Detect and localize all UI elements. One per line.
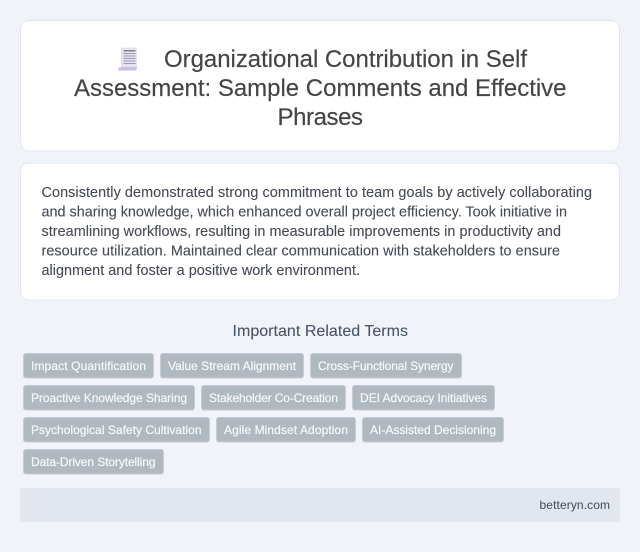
panel: summary text: [20, 163, 620, 300]
tag: Impact Quantification: Impact Quantification: [31, 359, 146, 373]
tag: Value Stream Alignment: [160, 354, 304, 378]
tag: Agile Mindset Adoption: [216, 418, 356, 442]
tag list: [24, 354, 504, 474]
text block: summary paragraph: [42, 185, 592, 279]
tag: Stakeholder Co-Creation: Stakeholder Co-Creation: [209, 391, 338, 405]
tag: Psychological Safety Cultivation: Psychological Safety Cultivation: [31, 423, 202, 437]
heading: important related terms: Important Related Terms: [232, 323, 408, 340]
footer bar: [20, 488, 620, 522]
tag: AI-Assisted Decisioning: [362, 418, 504, 442]
title: [74, 46, 566, 131]
icon: paper scroll: [118, 48, 137, 70]
tag: Psychological Safety Cultivation: [24, 418, 210, 442]
tag: DEI Advocacy Initiatives: DEI Advocacy Initiatives: [360, 391, 487, 405]
text block: summary paragraph: streamlining workflows, resulting in measurable improvements in productivity and: [42, 224, 561, 240]
tag: Cross-Functional Synergy: [310, 354, 462, 378]
tag: Stakeholder Co-Creation: [202, 386, 346, 410]
text block: summary paragraph: Consistently demonstrated strong commitment to team goals by actively collaborating: [42, 185, 592, 201]
tag: Data-Driven Storytelling: [24, 450, 164, 474]
footer text: site name: betteryn.com: [540, 498, 610, 512]
tag: Value Stream Alignment: Value Stream Alignment: [168, 359, 297, 373]
title: Organizational Contribution in Self: [164, 46, 527, 73]
title: Phrases: [278, 104, 363, 131]
text block: summary paragraph: alignment and foster a positive work environment.: [42, 263, 360, 279]
tag: Data-Driven Storytelling: Data-Driven Storytelling: [31, 455, 156, 469]
text block: summary paragraph: and sharing knowledge, which enhanced overall project efficiency. Took initiative in: [42, 204, 567, 220]
tag: DEI Advocacy Initiatives: [352, 386, 494, 410]
text block: summary paragraph: resource utilization. Maintained clear communication with stakeholders to ensure: [42, 243, 560, 259]
tag: Cross-Functional Synergy: Cross-Functional Synergy: [318, 359, 454, 373]
title: Assessment: Sample Comments and Effective: [74, 75, 566, 102]
tag: AI-Assisted Decisioning: AI-Assisted Decisioning: [370, 423, 496, 437]
panel: title card: [20, 20, 620, 151]
tag: Impact Quantification: [24, 354, 154, 378]
tag: Proactive Knowledge Sharing: Proactive Knowledge Sharing: [31, 391, 187, 405]
tag: Agile Mindset Adoption: Agile Mindset Adoption: [224, 423, 348, 437]
tag: Proactive Knowledge Sharing: [24, 386, 194, 410]
